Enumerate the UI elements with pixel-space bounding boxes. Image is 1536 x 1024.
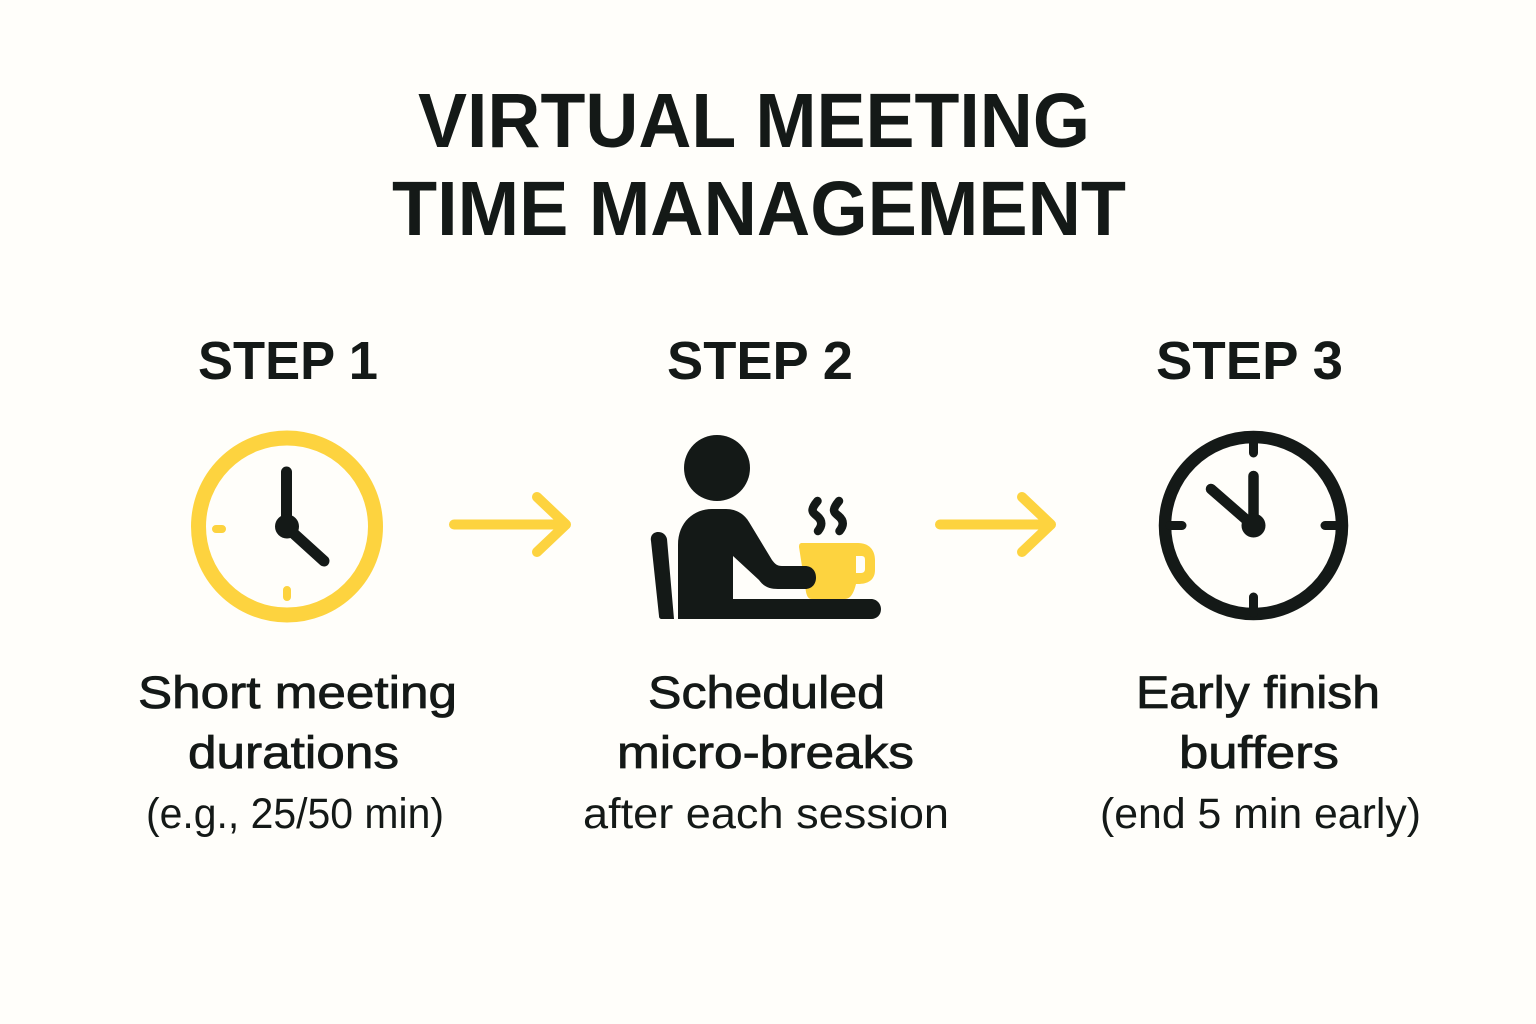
text: step 1 description: durations [188,727,399,778]
title: VIRTUAL MEETING [418,78,1090,164]
title: TIME MANAGEMENT [392,166,1126,252]
title [392,78,1126,252]
body, arm and table [678,509,881,619]
text: step 3 description: buffers [1179,727,1339,778]
icon: dark clock [1165,437,1342,614]
text: step 1 description: Short meeting [138,667,457,718]
coffee mug [799,543,875,599]
text: step 1 description: (e.g., 25/50 min) [146,790,444,838]
text: step 2 description [583,667,949,838]
heading: step 2: STEP 2 [667,331,853,391]
icon: yellow clock [198,438,376,615]
text: step 2 description: micro-breaks [617,727,914,778]
heading: step 3: STEP 3 [1156,331,1343,391]
text: step 3 description: (end 5 min early) [1100,790,1421,838]
text: step 3 description: Early finish [1136,667,1380,718]
text: step 2 description: Scheduled [648,667,885,718]
text: step 1 description [138,667,457,838]
steam [813,501,843,531]
icon: person on break with coffee [651,435,881,619]
head [684,435,750,501]
arrow: step 1 to step 2 [454,497,566,552]
panel: step 3 [1100,331,1421,838]
arrow: step 2 to step 3 [940,497,1051,552]
text: step 2 description: after each session [583,790,949,838]
panel: step 1 [138,331,457,838]
chair back [651,532,674,619]
panel: step 2 [583,331,949,838]
text: step 3 description [1100,667,1421,838]
heading: step 1: STEP 1 [198,331,378,391]
